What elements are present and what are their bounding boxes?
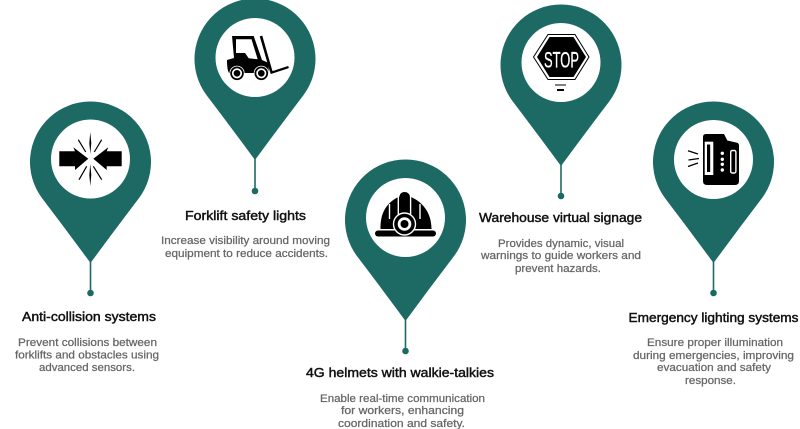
- icon: forklift: [227, 36, 288, 81]
- text: emergency description: [633, 337, 794, 387]
- pin marker: helmet: [345, 159, 466, 354]
- text: anti-collision description: Prevent collisions between: [18, 337, 157, 349]
- text: helmet description: Enable real-time communication: [320, 393, 485, 405]
- panel: forklift safety lights: [161, 0, 330, 260]
- text: anti-collision description: [15, 337, 159, 374]
- text: forklift description: equipment to reduce accidents.: [165, 248, 328, 260]
- text: helmet description: [320, 393, 485, 429]
- text: forklift description: Increase visibility around moving: [161, 235, 330, 247]
- icon: stop sign: [534, 34, 589, 90]
- text: emergency description: Ensure proper illumination: [647, 337, 783, 349]
- heading: emergency lighting systems: Emergency lighting systems: [628, 310, 799, 325]
- text: helmet description: for workers, enhancing: [341, 405, 464, 417]
- text: emergency description: response.: [685, 375, 736, 387]
- text: warehouse description: Provides dynamic, visual: [498, 238, 624, 250]
- heading: forklift safety lights: Forklift safety lights: [185, 208, 307, 223]
- icon: stop sign: STOP: [544, 48, 579, 72]
- text: forklift description: [161, 235, 330, 260]
- icon: hard hat: [378, 192, 433, 235]
- text: emergency description: during emergencies, improving: [633, 350, 794, 362]
- text: anti-collision description: forklifts and obstacles using: [15, 350, 159, 362]
- pin marker: emergency light: [653, 101, 774, 296]
- pin marker: anti-collision: [30, 101, 151, 296]
- panel: warehouse virtual signage: [479, 4, 642, 275]
- icon: emergency light: [688, 134, 739, 185]
- text: anti-collision description: advanced sensors.: [39, 362, 135, 374]
- heading: 4G helmets with walkie-talkies: 4G helmets with walkie-talkies: [306, 365, 495, 380]
- panel: anti-collision systems: [15, 101, 159, 374]
- text: emergency description: evacuation and safety: [657, 362, 772, 374]
- heading: warehouse virtual signage: Warehouse virtual signage: [479, 210, 642, 225]
- panel: emergency lighting systems: [628, 101, 799, 387]
- heading: anti-collision systems: Anti-collision systems: [22, 309, 157, 324]
- pin marker: forklift: [194, 0, 316, 194]
- pin marker: stop sign: [500, 4, 622, 199]
- text: warehouse description: [480, 238, 641, 275]
- text: warehouse description: warnings to guide workers and: [480, 250, 641, 262]
- icon: colliding arrows: [59, 132, 122, 186]
- text: warehouse description: prevent hazards.: [515, 263, 601, 275]
- panel: 4G helmets with walkie-talkies: [306, 159, 495, 429]
